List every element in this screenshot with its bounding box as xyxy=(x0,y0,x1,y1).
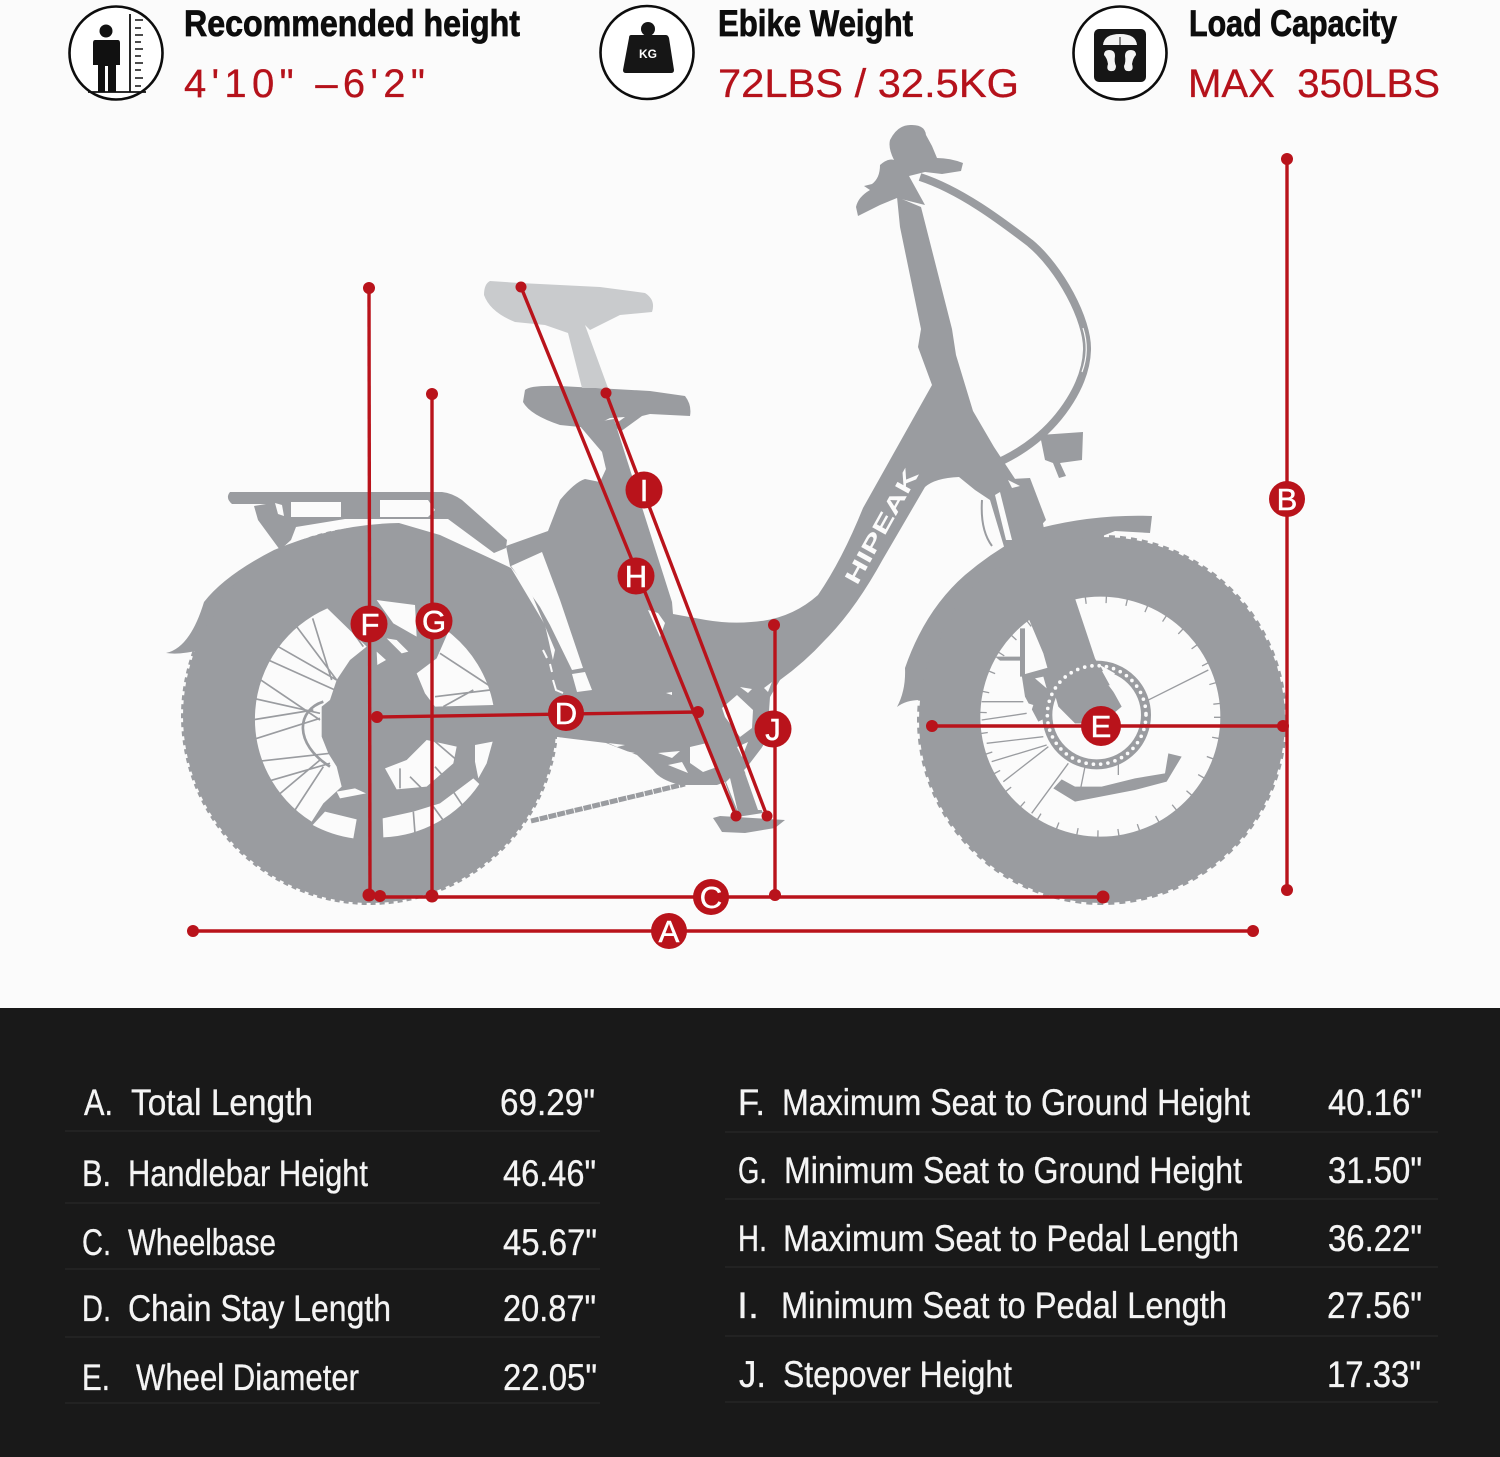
dimension G: min seat to ground: G xyxy=(422,604,446,639)
dimension C: wheelbase xyxy=(374,879,1110,915)
row A: 69.29" xyxy=(500,1082,595,1123)
rear fender xyxy=(166,523,562,720)
row B: Handlebar Height xyxy=(128,1153,369,1194)
dimension H: max seat to pedal xyxy=(516,282,742,822)
row F: 40.16" xyxy=(1328,1082,1422,1123)
dimension D: chain stay length: D xyxy=(555,696,577,731)
dimension F: max seat to ground xyxy=(350,282,388,902)
row E: Wheel Diameter xyxy=(136,1357,359,1398)
seat low position xyxy=(523,386,690,432)
value: weight: 72LBS / 32.5KG xyxy=(718,62,1019,106)
row A: A. xyxy=(84,1082,113,1123)
dimension B: handlebar height: B xyxy=(1277,482,1297,517)
header stat: ebike weight xyxy=(600,3,1019,106)
row C: Wheelbase xyxy=(128,1222,276,1263)
dimension B: handlebar height xyxy=(1269,153,1305,896)
chain xyxy=(531,784,685,821)
dimension G: min seat to ground xyxy=(416,388,452,902)
dimension I: min seat to pedal: I xyxy=(640,473,648,508)
dimension H: max seat to pedal: H xyxy=(625,559,647,594)
header stat: load capacity xyxy=(1074,3,1440,106)
row G: G. xyxy=(738,1150,767,1191)
handlebar and controls xyxy=(856,125,963,216)
dimension D: chain stay length xyxy=(371,695,704,731)
pedal xyxy=(713,816,785,833)
value: max load: MAX 350LBS xyxy=(1188,62,1440,106)
row D: D. xyxy=(82,1288,111,1329)
row J: J. xyxy=(739,1354,766,1395)
row I: 27.56" xyxy=(1327,1285,1422,1326)
value: height range: 4'10" –6'2" xyxy=(184,62,425,106)
frame cut-outs xyxy=(511,552,772,812)
icon: KG weight: KG xyxy=(639,47,657,61)
headlight xyxy=(1040,432,1083,478)
row H: 36.22" xyxy=(1328,1218,1422,1259)
dimension A: total length: A xyxy=(659,914,680,949)
rear wheel xyxy=(183,529,557,903)
row D: 20.87" xyxy=(503,1288,596,1329)
heading: recommended height: Recommended height xyxy=(184,3,520,44)
row E: 22.05" xyxy=(503,1357,597,1398)
dimension J: stepover height: J xyxy=(765,712,781,747)
dimension J: stepover height xyxy=(754,619,792,901)
row I: Minimum Seat to Pedal Length xyxy=(781,1285,1227,1326)
row J xyxy=(739,1354,1421,1395)
row H: Maximum Seat to Pedal Length xyxy=(783,1218,1239,1259)
row G: Minimum Seat to Ground Height xyxy=(784,1150,1243,1191)
row D xyxy=(82,1288,596,1329)
dimension C: wheelbase: C xyxy=(700,880,722,915)
row E: E. xyxy=(82,1357,110,1398)
row J: 17.33" xyxy=(1327,1354,1421,1395)
bike frame and battery xyxy=(506,197,1046,817)
row B: B. xyxy=(82,1153,111,1194)
row E xyxy=(82,1357,597,1398)
row A: Total Length xyxy=(131,1082,313,1123)
dimension F: max seat to ground: F xyxy=(361,607,379,642)
panel: dimensions table xyxy=(0,1008,1500,1457)
row G: 31.50" xyxy=(1328,1150,1422,1191)
row J: Stepover Height xyxy=(783,1354,1013,1395)
bike silhouette xyxy=(166,125,1285,903)
front wheel xyxy=(919,537,1285,903)
row C: C. xyxy=(82,1222,111,1263)
row D: Chain Stay Length xyxy=(128,1288,391,1329)
brake and shift cables xyxy=(920,177,1087,466)
row C xyxy=(82,1222,597,1263)
icon: KG weight xyxy=(600,6,694,99)
dimension E: wheel diameter: E xyxy=(1091,709,1111,744)
dimension A: total length xyxy=(187,913,1259,949)
row A xyxy=(84,1082,595,1123)
header stat: recommended height xyxy=(70,3,520,106)
seat high position xyxy=(484,281,653,388)
icon: person with height ruler xyxy=(70,6,162,100)
row H: H. xyxy=(738,1218,767,1259)
fork crown and brake cable xyxy=(982,478,1046,548)
brand name: HIPEAK xyxy=(840,464,924,588)
dimension E: wheel diameter xyxy=(926,706,1289,746)
rear rack xyxy=(228,492,507,553)
row B xyxy=(82,1153,596,1194)
row F: F. xyxy=(738,1082,765,1123)
heading: load capacity: Load Capacity xyxy=(1189,3,1397,44)
heading: ebike weight: Ebike Weight xyxy=(718,3,913,44)
row I: I. xyxy=(737,1285,759,1326)
front fender xyxy=(897,516,1200,720)
row C: 45.67" xyxy=(503,1222,597,1263)
icon: bathroom scale xyxy=(1074,6,1166,100)
dimension I: min seat to pedal xyxy=(600,388,772,822)
row F: Maximum Seat to Ground Height xyxy=(782,1082,1251,1123)
row B: 46.46" xyxy=(503,1153,596,1194)
